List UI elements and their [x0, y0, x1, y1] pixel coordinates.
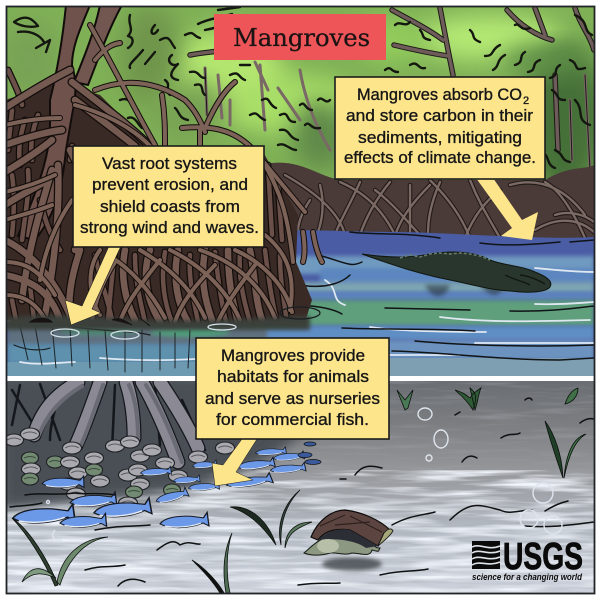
callout: erosion: strong wind and waves. [80, 218, 259, 237]
callout: carbon: Mangroves absorb CO [357, 85, 522, 104]
seabed [0, 376, 594, 593]
callout: carbon: effects of climate change. [344, 148, 536, 167]
sea turtle [304, 510, 393, 571]
title: Mangroves [233, 24, 370, 52]
white divider strip [7, 376, 594, 382]
foreground mangrove trees and roots [5, 5, 322, 339]
forest canopy [7, 7, 594, 180]
callout: carbon: and store carbon in their [346, 106, 533, 125]
air bubbles [46, 408, 562, 540]
arrow: water callout [476, 178, 538, 240]
callout: erosion: prevent erosion, and [92, 175, 248, 194]
USGS logo [472, 541, 582, 582]
seagrass [12, 388, 586, 593]
callout: carbon [335, 77, 545, 179]
sediment ink marks [10, 398, 594, 586]
callout: erosion: Vast root systems [102, 154, 237, 173]
leaves scribbles [14, 7, 592, 168]
crocodile [362, 252, 551, 296]
panel: underwater scene [0, 376, 594, 593]
callout: habitats: and serve as nurseries [205, 389, 380, 408]
logo mark [472, 541, 500, 569]
logo tagline: science for a changing world [472, 572, 582, 583]
callout: carbon: 2 [523, 95, 529, 107]
callout: habitats [196, 338, 389, 439]
callout: carbon: sediments, mitigating [358, 128, 522, 147]
callout: habitats: Mangroves provide [221, 346, 365, 365]
title [214, 14, 386, 60]
tree trunks [18, 5, 90, 240]
oysters on prop roots [4, 428, 234, 509]
callout: erosion [73, 146, 264, 247]
far tree branches [190, 8, 594, 170]
background mangrove roots [271, 162, 594, 238]
callout: habitats: for commercial fish. [216, 410, 369, 429]
underwater roots [12, 382, 205, 462]
arrow: roots callout [65, 246, 121, 325]
panel: mangrove forest above water [0, 5, 600, 377]
water highlights and ink [14, 232, 594, 372]
water [7, 230, 594, 377]
school of fish [11, 442, 321, 530]
callout: erosion: shield coasts from [100, 197, 240, 216]
arrow: fish callout [212, 439, 257, 486]
callout: habitats: habitats for animals [217, 367, 369, 386]
